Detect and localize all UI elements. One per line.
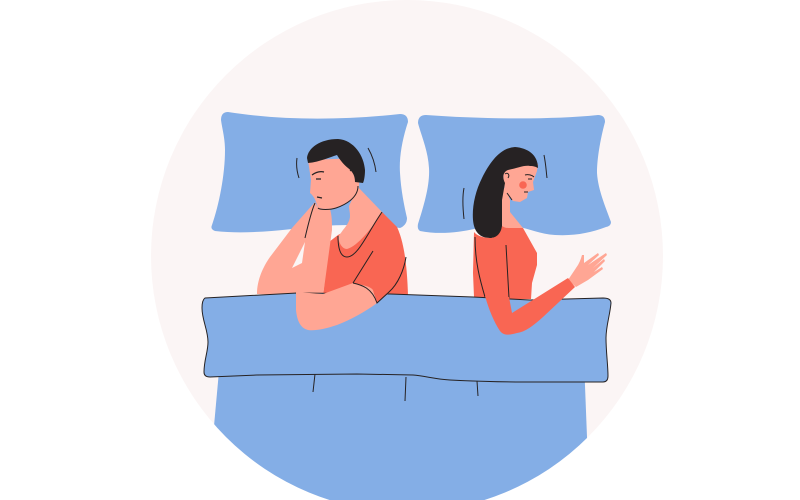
man upper figure <box>257 139 408 296</box>
woman cheek <box>519 181 527 189</box>
woman head <box>503 164 538 202</box>
man collar line <box>338 212 382 257</box>
man line details <box>297 148 376 283</box>
man upper arm and hand <box>257 202 332 296</box>
woman upper figure <box>463 147 607 299</box>
man sleeve tip <box>373 288 389 303</box>
man neck <box>338 187 382 249</box>
blanket fold <box>202 293 611 382</box>
woman arm over blanket <box>485 278 575 335</box>
woman neck <box>500 183 523 229</box>
right pillow <box>418 115 611 235</box>
man forearm over blanket <box>296 283 377 330</box>
woman shirt <box>473 226 537 299</box>
man hair <box>307 139 365 183</box>
blanket body <box>214 374 587 500</box>
left pillow <box>211 112 408 232</box>
man face <box>312 172 324 198</box>
background circle <box>151 0 663 500</box>
blanket wrinkles <box>313 374 478 401</box>
woman hand <box>568 253 607 287</box>
woman line details <box>463 155 547 298</box>
woman hair <box>473 147 538 238</box>
man shirt <box>323 212 408 296</box>
man head <box>308 158 360 209</box>
man sleeve outline <box>353 257 406 303</box>
